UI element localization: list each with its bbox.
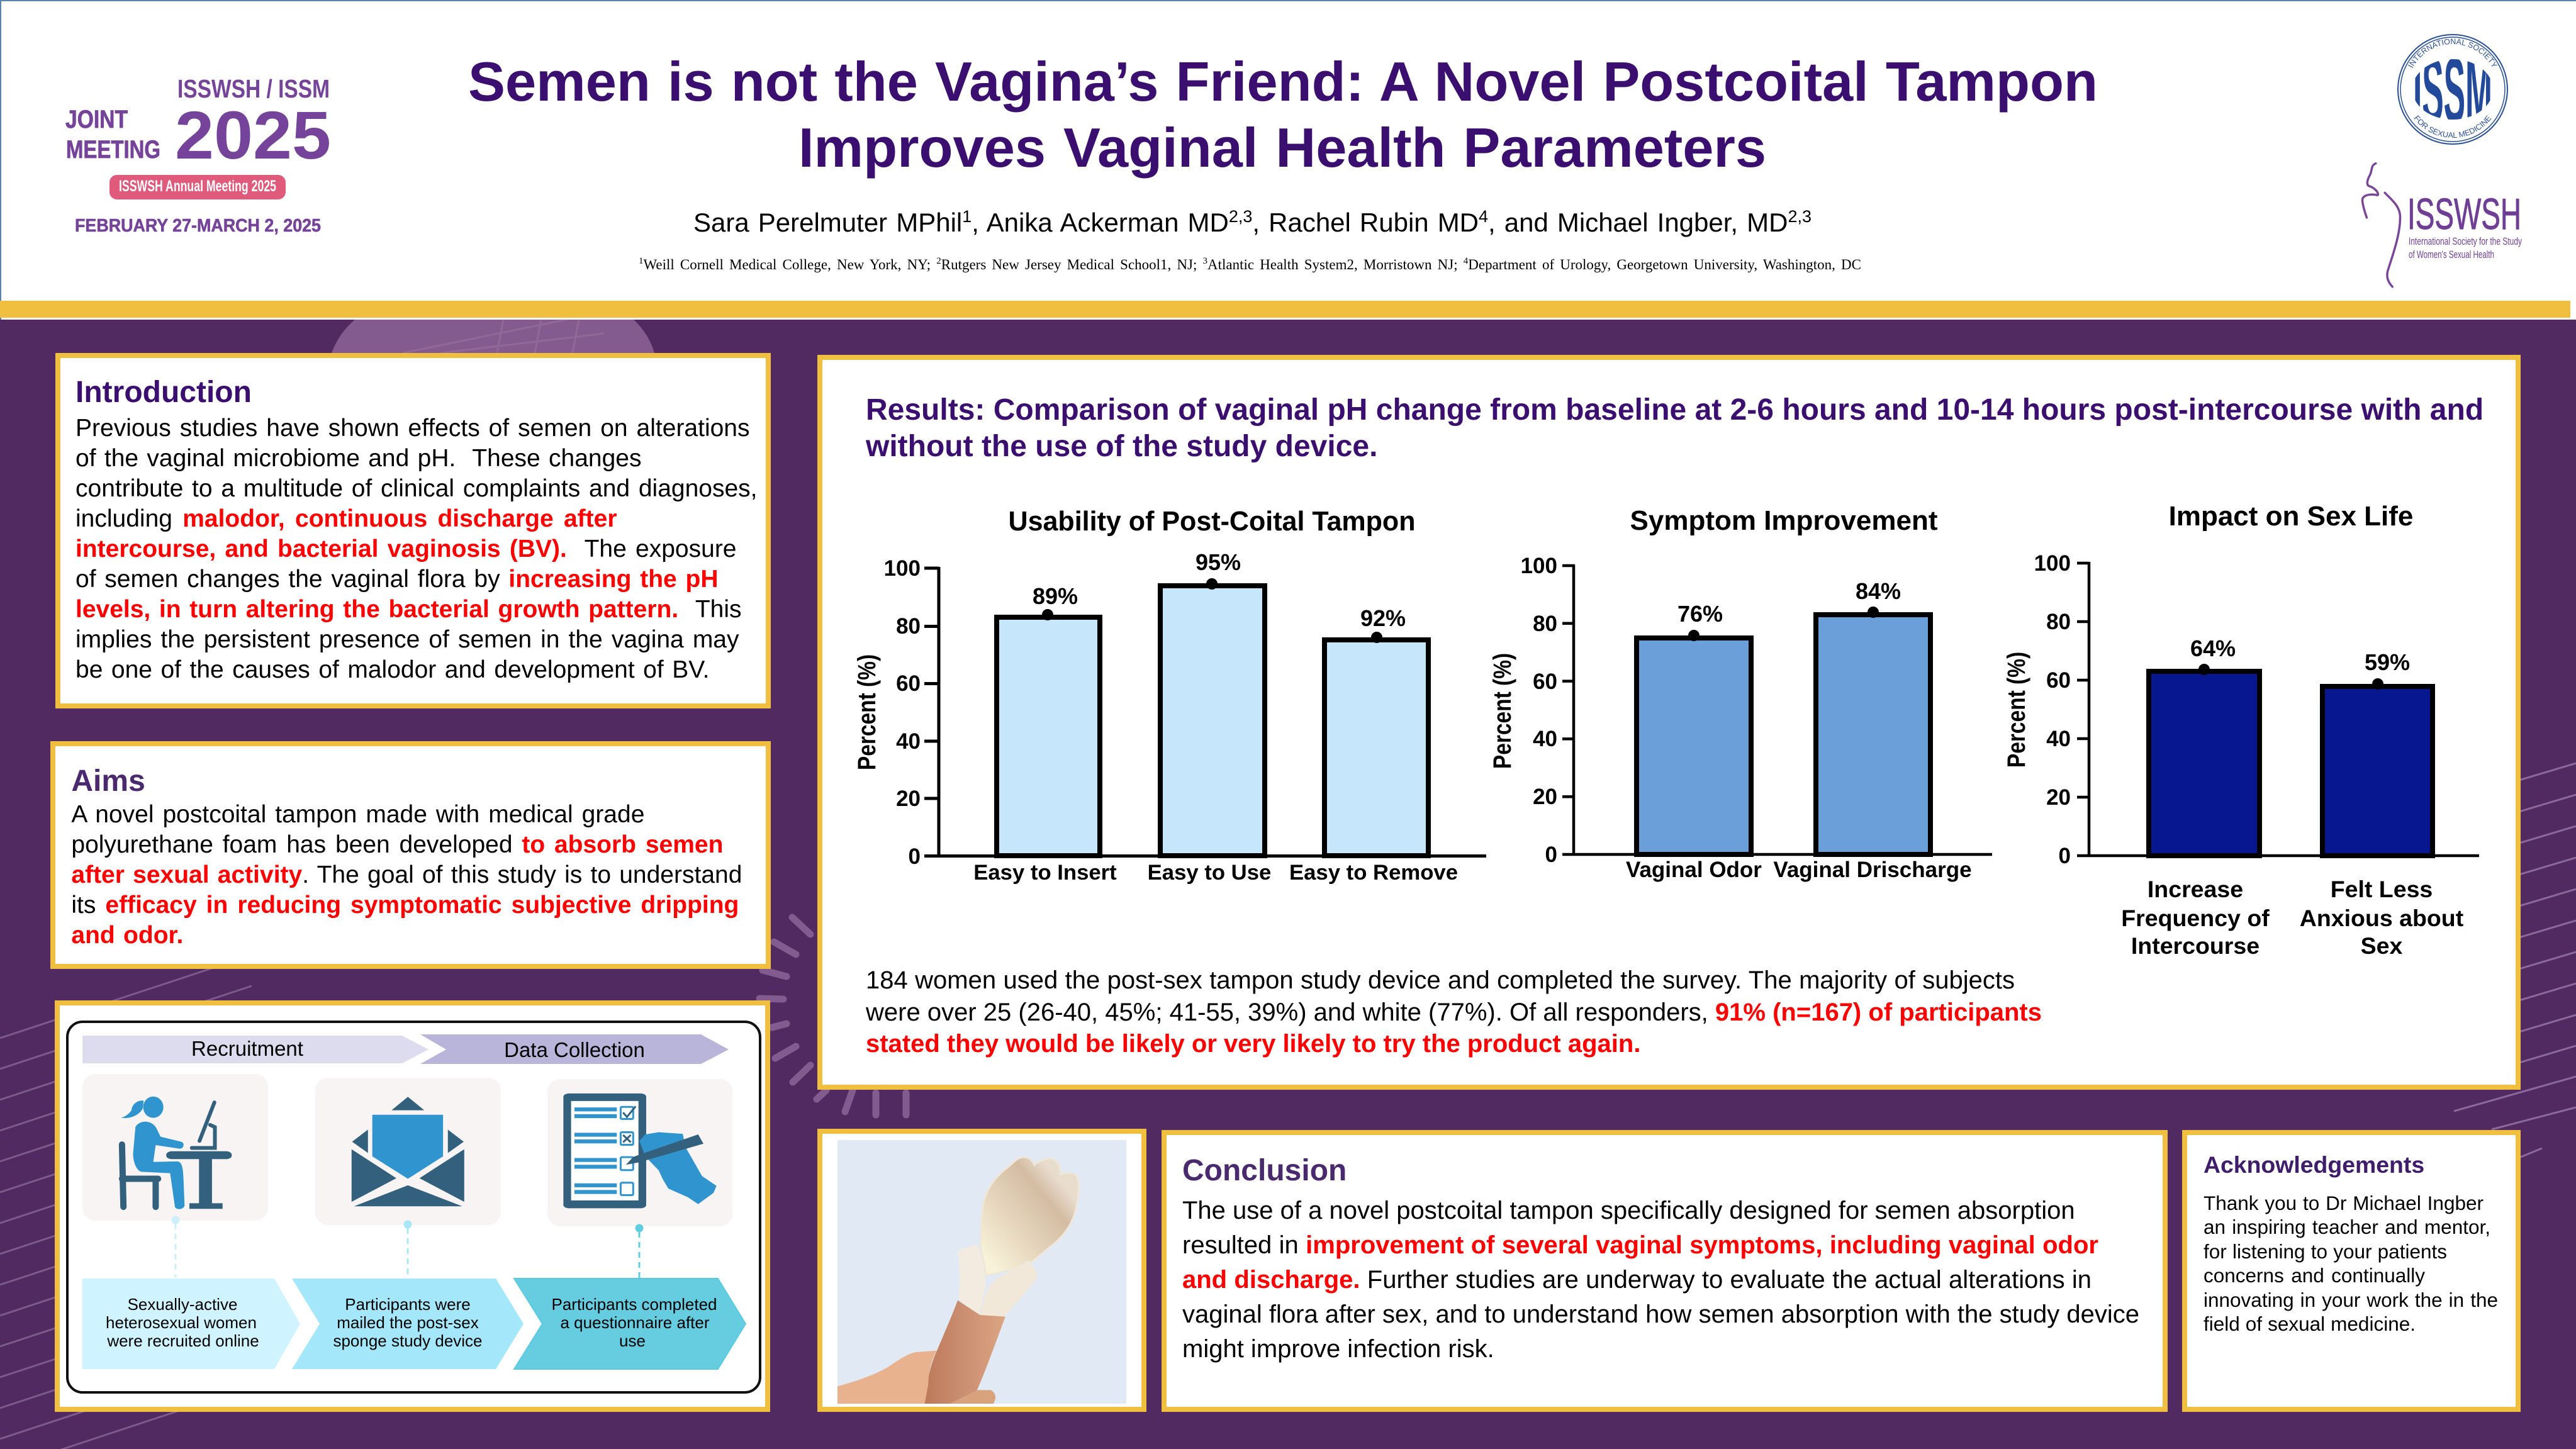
bar chart: impact on sex life: 0	[2059, 844, 2071, 868]
text: results summary: were over 25 (26-40, 45%; 41-55, 39%) and white (77%). Of all responders, 91% (n=167) of participants	[866, 998, 2042, 1026]
bar chart: usability of post-coital tampon: 80	[896, 614, 921, 639]
step: mailed device: mailed the post-sex	[337, 1313, 479, 1332]
bar chart: impact on sex life: Felt Less	[2331, 876, 2433, 902]
image: post-coital tampon held in hand	[837, 1140, 1126, 1404]
bar chart: impact on sex life: 59%	[2365, 649, 2410, 675]
text: aims body: A novel postcoital tampon made with medical grade	[71, 800, 644, 828]
bar chart: impact on sex life	[2002, 501, 2479, 959]
logo: ISSWSH / ISSM joint meeting 2025: FEBRUARY 27-MARCH 2, 2025	[75, 216, 321, 236]
bar chart: impact on sex life: 60	[2046, 668, 2071, 693]
step: questionnaire: a questionnaire after	[560, 1313, 710, 1332]
bar chart: impact on sex life: 100	[2034, 551, 2071, 576]
arrow: data collection	[420, 1034, 729, 1064]
bar chart: impact on sex life: Impact on Sex Life	[2169, 501, 2413, 532]
bar chart: impact on sex life: 64%	[2190, 635, 2236, 661]
text: aims body: and odor.	[71, 921, 183, 949]
title: Improves Vaginal Health Parameters	[798, 116, 1766, 179]
text: acknowledgements body: an inspiring teacher and mentor,	[2204, 1216, 2490, 1238]
text: acknowledgements body: concerns and continually	[2204, 1264, 2425, 1287]
bar chart: usability of post-coital tampon: 20	[896, 786, 921, 811]
bar chart: usability of post-coital tampon	[853, 506, 1486, 885]
text: introduction body: of semen changes the vaginal flora by increasing the pH	[76, 565, 719, 593]
step: mailed device: Participants were	[345, 1295, 471, 1314]
affiliations: 1Weill Cornell Medical College, New York, NY; 2Rutgers New Jersey Medical School1, NJ; 3Atlantic Health System2, Morristown NJ; 4Department of Urology, Georgetown University, Washington, DC	[639, 256, 1861, 272]
bar chart: impact on sex life: Frequency of	[2121, 905, 2270, 931]
panel: conclusion	[1162, 1130, 2168, 1412]
icon: open envelope	[315, 1078, 501, 1225]
bar chart: usability of post-coital tampon: 89%	[1033, 583, 1078, 609]
text: aims body: polyurethane foam has been developed to absorb semen	[71, 831, 723, 858]
bar chart: symptom improvement: 60	[1533, 669, 1557, 694]
bar chart: usability of post-coital tampon: Percent (%)	[853, 654, 881, 770]
bar chart: usability of post-coital tampon: 40	[896, 729, 921, 754]
text: introduction body: of the vaginal microbiome and pH. These changes	[76, 444, 642, 472]
logo: ISSWSH / ISSM joint meeting 2025: 2025	[175, 97, 331, 173]
logo: ISSWSH / ISSM joint meeting 2025: MEETING	[66, 136, 160, 164]
bar chart: impact on sex life: Anxious about	[2300, 905, 2464, 931]
icon: person at computer	[82, 1074, 268, 1221]
text: conclusion body: and discharge. Further studies are underway to evaluate the actual alterations in	[1182, 1266, 2092, 1294]
connector: step 2	[404, 1221, 412, 1277]
text: results summary	[866, 966, 2042, 1058]
bar chart: symptom improvement: Vaginal Odor	[1626, 858, 1762, 882]
step: questionnaire: Participants completed	[551, 1295, 717, 1314]
text: results summary: stated they would be likely or very likely to try the product again.	[866, 1030, 1640, 1058]
text: conclusion body: The use of a novel postcoital tampon specifically designed for semen absorption	[1182, 1197, 2075, 1224]
text: introduction body: including malodor, continuous discharge after	[76, 505, 617, 532]
panel: aims	[50, 741, 771, 969]
step: recruited online: were recruited online	[106, 1331, 259, 1350]
heading: aims: Aims	[71, 764, 145, 798]
title	[468, 50, 2098, 179]
heading: conclusion: Conclusion	[1182, 1154, 1347, 1187]
bar chart: usability of post-coital tampon: 60	[896, 671, 921, 696]
text: conclusion body	[1182, 1197, 2139, 1363]
text: introduction body	[76, 414, 758, 683]
gold divider bar	[0, 301, 2570, 318]
bar chart: impact on sex life: Sex	[2361, 932, 2403, 959]
arrow: recruitment: Recruitment	[191, 1037, 303, 1060]
bar chart: symptom improvement: 76%	[1677, 601, 1723, 627]
bar chart: symptom improvement	[1488, 505, 1992, 882]
heading: acknowledgements: Acknowledgements	[2204, 1151, 2424, 1178]
text: acknowledgements body: field of sexual medicine.	[2204, 1312, 2416, 1335]
bar chart: usability of post-coital tampon: 92%	[1360, 605, 1406, 631]
text: introduction body: levels, in turn altering the bacterial growth pattern. This	[76, 595, 741, 623]
text: acknowledgements body	[2204, 1192, 2498, 1335]
panel: acknowledgements	[2182, 1130, 2521, 1412]
logo: ISSWSH / ISSM joint meeting 2025	[65, 74, 331, 236]
step: mailed device: sponge study device	[333, 1331, 483, 1350]
text: results summary: 184 women used the post-sex tampon study device and completed the survey. The majority of subjects	[866, 966, 2015, 994]
bar chart: symptom improvement: 84%	[1856, 578, 1901, 604]
text: acknowledgements body: innovating in your work the in the	[2204, 1289, 2498, 1311]
bar chart: usability of post-coital tampon: 100	[884, 556, 921, 581]
bar chart: impact on sex life: Percent (%)	[2002, 652, 2030, 768]
arrow: data collection: Data Collection	[504, 1038, 645, 1061]
text: introduction body: be one of the causes of malodor and development of BV.	[76, 656, 710, 683]
heading: introduction: Introduction	[76, 376, 252, 409]
heading: results: Results: Comparison of vaginal pH change from baseline at 2-6 hours and 10-14 hours post-intercourse with and	[866, 393, 2484, 427]
bar chart: impact on sex life: Intercourse	[2131, 932, 2260, 959]
text: acknowledgements body: Thank you to Dr Michael Ingber	[2204, 1192, 2484, 1214]
header band	[0, 0, 2576, 320]
bar chart: impact on sex life: 80	[2046, 610, 2071, 634]
bar chart: usability of post-coital tampon: Easy to Remove	[1289, 861, 1458, 885]
text: conclusion body: might improve infection risk.	[1182, 1335, 1494, 1363]
text: conclusion body: resulted in improvement of several vaginal symptoms, including vaginal odor	[1182, 1231, 2098, 1259]
text: aims body: after sexual activity. The goal of this study is to understand	[71, 861, 742, 888]
bar chart: symptom improvement: 80	[1533, 612, 1557, 636]
text: conclusion body: vaginal flora after sex, and to understand how semen absorption with the study device	[1182, 1301, 2139, 1328]
heading: results: without the use of the study device.	[866, 430, 1377, 463]
text: introduction body: implies the persistent presence of semen in the vagina may	[76, 625, 739, 653]
icon: checklist and hand	[547, 1079, 732, 1226]
panel: device photo	[817, 1129, 1146, 1412]
logo: ISSWSH / ISSM joint meeting 2025: ISSWSH Annual Meeting 2025	[119, 177, 276, 195]
text: acknowledgements body: for listening to your patients	[2204, 1240, 2447, 1263]
bar chart: symptom improvement: Percent (%)	[1488, 653, 1516, 769]
bar chart: symptom improvement: Symptom Improvement	[1630, 505, 1938, 536]
bar chart: usability of post-coital tampon: Easy to Insert	[973, 861, 1117, 885]
panel: study flow diagram	[55, 1000, 770, 1412]
bar chart: impact on sex life: 20	[2046, 785, 2071, 810]
bar chart: symptom improvement: Vaginal Drischarge	[1773, 858, 1972, 882]
arrow: recruitment	[82, 1036, 428, 1063]
connector: step 1	[172, 1216, 179, 1277]
bar chart: symptom improvement: 20	[1533, 785, 1557, 809]
text: introduction body: Previous studies have shown effects of semen on alterations	[76, 414, 750, 442]
logo: ISSWSH / ISSM joint meeting 2025: ISSWSH / ISSM	[177, 74, 330, 103]
step: recruited online: Sexually-active	[128, 1295, 237, 1314]
step: recruited online	[82, 1278, 300, 1369]
panel: results	[817, 355, 2521, 1090]
text: aims body: its efficacy in reducing symptomatic subjective dripping	[71, 891, 739, 919]
panel: introduction	[55, 353, 771, 708]
title: Semen is not the Vagina’s Friend: A Novel Postcoital Tampon	[468, 50, 2098, 113]
bar chart: usability of post-coital tampon: Usability of Post-Coital Tampon	[1008, 506, 1416, 537]
text: introduction body: intercourse, and bacterial vaginosis (BV). The exposure	[76, 535, 736, 562]
authors: Sara Perelmuter MPhil1, Anika Ackerman MD2,3, Rachel Rubin MD4, and Michael Ingber, MD2,3	[693, 206, 1812, 237]
logo: ISSWSH	[2361, 162, 2522, 288]
bar chart: usability of post-coital tampon: 95%	[1196, 549, 1241, 575]
logo: ISSM seal: INTERNATIONAL SOCIETY	[2408, 38, 2498, 68]
bar chart: symptom improvement: 40	[1533, 727, 1557, 751]
bar chart: symptom improvement: 0	[1545, 842, 1557, 867]
text: introduction body: contribute to a multitude of clinical complaints and diagnoses,	[76, 474, 758, 502]
logo: ISSWSH / ISSM joint meeting 2025: JOINT	[65, 106, 128, 133]
logo: ISSM seal: FOR SEXUAL MEDICINE	[2414, 115, 2492, 138]
step: questionnaire	[514, 1278, 746, 1369]
bar chart: symptom improvement: 100	[1521, 554, 1557, 578]
heading: results	[866, 393, 2484, 463]
bar chart: usability of post-coital tampon: 0	[909, 844, 921, 869]
step: questionnaire: use	[619, 1331, 646, 1350]
text: aims body	[71, 800, 742, 949]
connector: step 3	[636, 1224, 643, 1281]
step: recruited online: heterosexual women	[106, 1313, 257, 1332]
bar chart: impact on sex life: Increase	[2148, 876, 2243, 902]
bar chart: impact on sex life: 40	[2046, 727, 2071, 751]
step: mailed device	[292, 1278, 524, 1369]
bar chart: usability of post-coital tampon: Easy to Use	[1148, 861, 1271, 885]
